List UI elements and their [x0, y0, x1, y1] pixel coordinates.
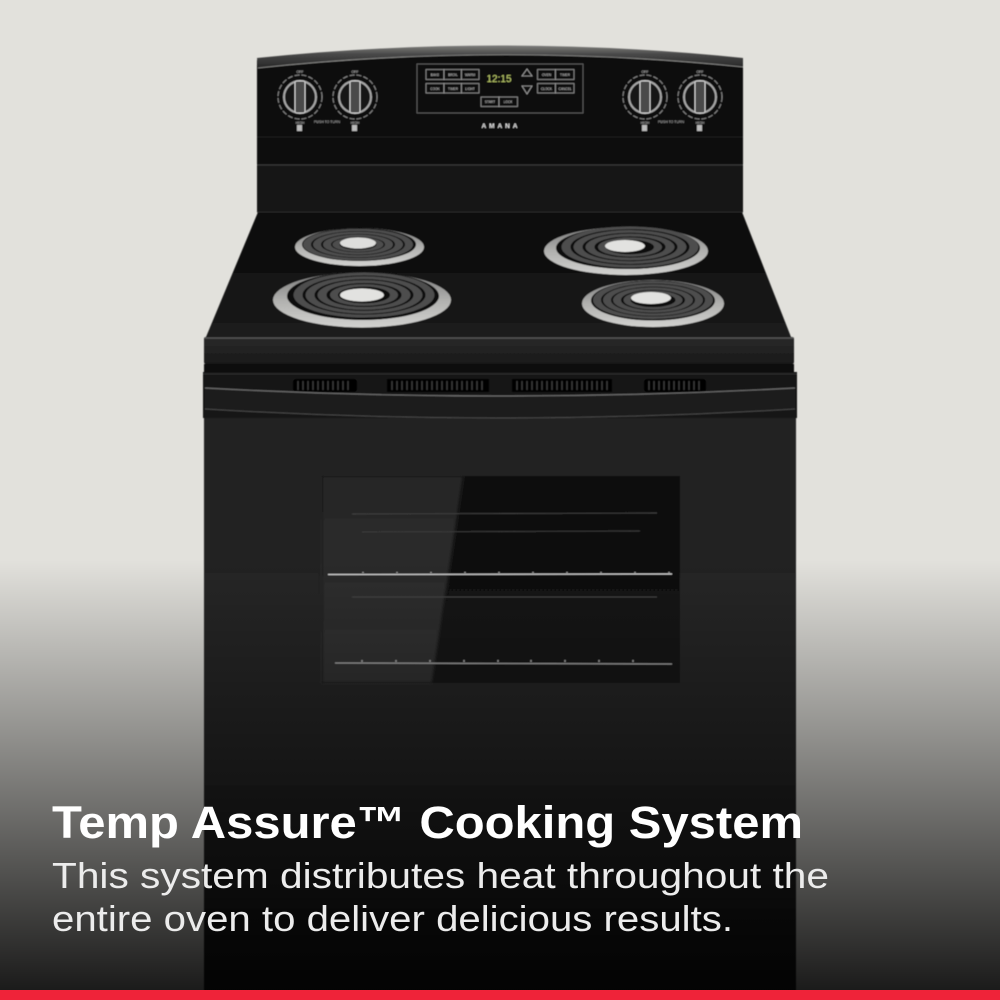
up and down arrows: [522, 69, 532, 94]
oven racks: [328, 513, 672, 664]
button labels: BROIL: [448, 73, 458, 77]
dial: right 1: OFF: [642, 70, 648, 74]
dial: right 2: [678, 70, 722, 131]
clock display: 12:15: [486, 74, 512, 85]
door top band with vents: [203, 372, 797, 418]
button labels: CANCEL: [559, 87, 572, 91]
dial: right 2: OFF: [696, 70, 704, 74]
description text: entire oven to deliver delicious results.: [52, 898, 733, 939]
dark gradient overlay: [0, 560, 1000, 1000]
burner: back right: [544, 227, 708, 275]
window glare: [322, 476, 463, 683]
dial: left 1: [278, 70, 322, 131]
description text: [52, 855, 829, 939]
range appliance: [203, 46, 797, 1000]
red footer bar: [0, 990, 1000, 1000]
button labels: TIMER: [560, 73, 571, 77]
button labels: CLOCK: [541, 87, 553, 91]
dial: left 1: OFF: [296, 70, 304, 74]
description text: This system distributes heat throughout the: [52, 855, 829, 896]
dial: right 2: HIGH: [696, 121, 705, 125]
control panel: [257, 46, 743, 150]
cooktop: [204, 212, 794, 372]
top trim: [257, 46, 743, 68]
button labels: [430, 73, 572, 104]
button labels: START: [485, 100, 495, 104]
control console: [417, 64, 583, 113]
dial: left 2: HIGH: [351, 121, 360, 125]
dial: right 1: HIGH: [641, 121, 650, 125]
button labels: TIMER: [448, 87, 459, 91]
dial: left 2: OFF: [352, 70, 358, 74]
burner: front right: [582, 280, 724, 327]
button labels: LOCK: [504, 100, 513, 104]
button labels: COOK: [430, 87, 441, 91]
dial: right 1: [623, 70, 667, 131]
button labels: BAKE: [431, 73, 439, 77]
backguard lower panel: [257, 150, 743, 212]
oven window: [322, 476, 680, 683]
burner: back left: [295, 228, 424, 266]
button labels: WARM: [465, 73, 475, 77]
dial: left 1: HIGH: [296, 121, 305, 125]
oven door: [204, 400, 796, 1000]
handle: [205, 388, 795, 418]
title: Temp Assure™ Cooking System: [52, 797, 803, 848]
button grid: [426, 70, 574, 106]
push to turn labels: PUSH TO TURN: [658, 120, 685, 124]
dial: left 2: [333, 70, 377, 131]
button labels: OVEN: [542, 73, 552, 77]
button labels: LIGHT: [465, 87, 475, 91]
push to turn labels: PUSH TO TURN: [314, 120, 341, 124]
push to turn labels: [314, 120, 685, 124]
front lip: [204, 337, 794, 372]
vents: [293, 379, 706, 392]
brand logo: AMANA: [482, 123, 518, 130]
burner: front left: [273, 272, 451, 328]
